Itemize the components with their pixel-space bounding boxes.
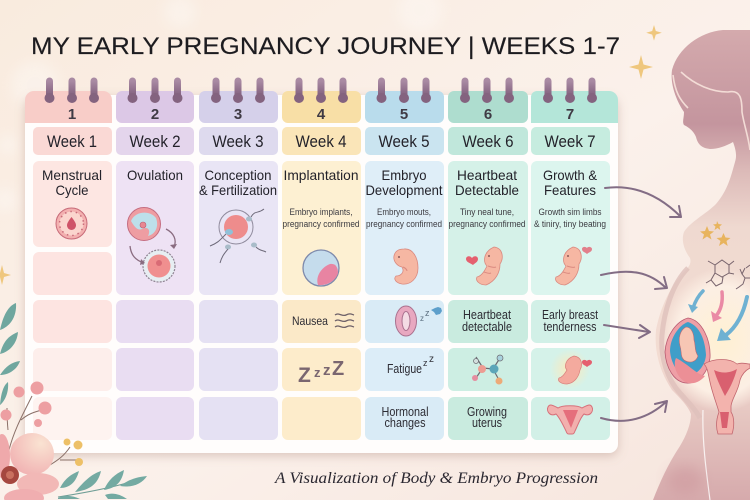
column 7: Features bbox=[544, 182, 596, 198]
column 7: Week 7 bbox=[544, 133, 596, 151]
column 5: z bbox=[429, 354, 434, 365]
column 3: Conception bbox=[204, 167, 272, 183]
subtitle: A Visualization of Body & Embryo Progression bbox=[274, 470, 598, 487]
column 6: Week 6 bbox=[462, 133, 514, 151]
icon: uterus bbox=[547, 405, 593, 434]
leg highlight bbox=[703, 410, 710, 500]
column 3: Week 3 bbox=[212, 133, 264, 151]
hormone molecules bbox=[706, 260, 750, 289]
flower petals bbox=[0, 433, 59, 500]
arrow: embryo to belly bbox=[601, 272, 667, 289]
column 1 bbox=[33, 127, 112, 440]
column 5: changes bbox=[384, 415, 426, 430]
icon: blastocyst bbox=[303, 250, 339, 286]
column 3 bbox=[199, 127, 278, 440]
column 5: Embryo bbox=[382, 167, 427, 183]
belly glow bbox=[662, 268, 750, 412]
week number tabs: 4 bbox=[317, 106, 326, 123]
hair highlight bbox=[673, 72, 750, 150]
sparkle left edge bbox=[0, 265, 11, 285]
icon: cycle dial bbox=[56, 208, 87, 239]
column 7: Early breast bbox=[542, 307, 598, 322]
arrow: growth to chest bbox=[605, 187, 681, 217]
week number tabs: 3 bbox=[234, 106, 242, 123]
column 5 bbox=[365, 127, 444, 440]
lower body mottling bbox=[667, 466, 703, 494]
icon: sleeping z letters: Z bbox=[298, 364, 311, 387]
sparkle small bbox=[646, 25, 662, 41]
column 4: Embryo implants, bbox=[290, 207, 352, 217]
buds bbox=[0, 382, 52, 427]
embryo in womb bbox=[665, 318, 710, 383]
column 7: Growth sim limbs bbox=[538, 207, 602, 217]
column 6: detectable bbox=[462, 319, 512, 334]
column 2: Ovulation bbox=[127, 167, 183, 183]
icon: glowing embryo bbox=[550, 349, 592, 389]
icon: nausea waves bbox=[335, 314, 354, 327]
week number tabs: 7 bbox=[566, 106, 574, 123]
week number tabs: 1 bbox=[68, 106, 76, 123]
column 6: Heartbeat bbox=[457, 167, 517, 183]
icon: embryo bbox=[394, 249, 418, 284]
column 5: Week 5 bbox=[378, 133, 430, 151]
icon: sleeping z letters: z bbox=[323, 362, 330, 379]
title: MY EARLY PREGNANCY JOURNEY | WEEKS 1-7 bbox=[31, 33, 620, 60]
week number tabs bbox=[25, 91, 618, 123]
chest stars bbox=[700, 221, 730, 246]
column 6: Tiny neal tune, bbox=[460, 207, 514, 217]
floral decoration bbox=[0, 382, 147, 500]
column 5: Embryo mouts, bbox=[377, 207, 431, 217]
icon: tired uterus with z: z bbox=[425, 308, 430, 318]
column 4: Implantation bbox=[284, 167, 358, 183]
arrow: uterus to pelvis bbox=[601, 401, 667, 421]
background bokeh bbox=[0, 0, 442, 212]
column 6 bbox=[448, 127, 528, 440]
column 7: & tiniry, tiny beating bbox=[534, 219, 606, 229]
pregnant silhouette figure bbox=[653, 30, 750, 500]
sparkles bbox=[0, 25, 662, 285]
icon: sleeping z letters: Z bbox=[332, 358, 344, 380]
card background bbox=[25, 95, 618, 453]
arrows to the body bbox=[601, 187, 681, 421]
column 7 bbox=[531, 127, 610, 440]
arrow: tenderness to womb bbox=[604, 325, 650, 338]
flower stems bbox=[7, 396, 78, 465]
icon: molecule bbox=[472, 355, 503, 384]
column 4 bbox=[282, 127, 361, 440]
column 7: Growth & bbox=[543, 167, 598, 183]
column 7: tenderness bbox=[544, 319, 597, 334]
column 6: pregnancy confirmed bbox=[448, 219, 526, 229]
column 6: Heartbeat bbox=[463, 307, 511, 322]
week number tabs: 5 bbox=[400, 106, 408, 123]
calendar card bbox=[25, 81, 618, 453]
icon: ovulation cells bbox=[128, 208, 177, 282]
column 5: Hormonal bbox=[382, 404, 429, 419]
column 5: z bbox=[423, 358, 428, 368]
column 6: Growing bbox=[467, 404, 507, 419]
week number tabs: 2 bbox=[151, 106, 159, 123]
icon: tired uterus with z bbox=[396, 306, 442, 336]
sparkle large bbox=[629, 55, 653, 79]
column 6: uterus bbox=[472, 415, 502, 430]
hormone arrows bbox=[688, 291, 747, 341]
column 1: Menstrual bbox=[42, 167, 102, 183]
column 5: pregnancy confirmed bbox=[366, 219, 442, 229]
icon: embryo with heart bbox=[556, 247, 592, 285]
flower centre bbox=[1, 466, 19, 484]
column 4: Nausea bbox=[292, 314, 328, 328]
week number tabs: 6 bbox=[484, 106, 492, 123]
column 2 bbox=[116, 127, 194, 440]
column 4: pregnancy confirmed bbox=[282, 219, 360, 229]
column 5: Fatigue bbox=[387, 362, 422, 376]
icon: sleeping z letters: z bbox=[314, 365, 321, 380]
spiral rings bbox=[44, 81, 597, 103]
icon: tired uterus with z: z bbox=[420, 314, 424, 323]
column 3: & Fertilization bbox=[199, 182, 277, 198]
column 6: Detectable bbox=[455, 182, 519, 198]
column 4: Week 4 bbox=[296, 133, 346, 151]
column 1: Week 1 bbox=[47, 133, 97, 151]
column 5: Development bbox=[366, 182, 443, 198]
belly rim bbox=[662, 268, 700, 418]
uterus bbox=[704, 360, 750, 434]
left leaves bbox=[0, 303, 20, 405]
column 2: Week 2 bbox=[130, 133, 180, 151]
icon: embryo with heart bbox=[466, 247, 502, 285]
yellow buds bbox=[64, 438, 83, 466]
silhouette body bbox=[653, 30, 750, 500]
bottom leaves bbox=[58, 477, 145, 497]
icon: fertilization bbox=[210, 209, 266, 263]
column 1: Cycle bbox=[56, 182, 89, 198]
icon: sleeping z letters bbox=[298, 358, 344, 387]
